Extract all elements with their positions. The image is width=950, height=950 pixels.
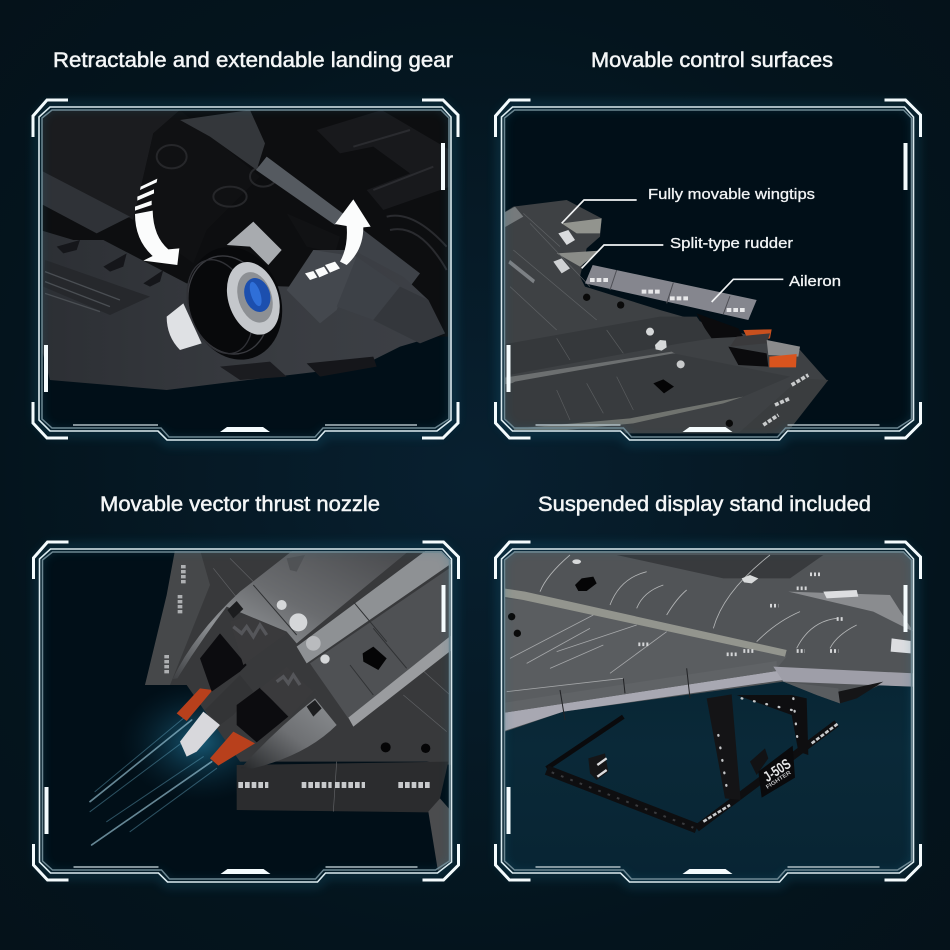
wing with tips [500, 200, 827, 433]
frame: landing gear [33, 100, 458, 442]
sign: J-50S: FIGHTER [765, 770, 792, 791]
diagonal bar [180, 110, 420, 287]
nozzles [697, 313, 800, 367]
title: control surfaces: Movable control surfaces [591, 49, 833, 72]
dark upper airframe [40, 110, 450, 337]
aileron [585, 265, 757, 320]
engine nacelles [173, 550, 452, 768]
icon: right rotation arrow [305, 199, 371, 280]
label: aileron: Aileron [789, 273, 841, 290]
frame: display stand [496, 542, 920, 884]
title: landing gear: Retractable and extendable landing gear [53, 49, 453, 72]
landing wheel [166, 222, 282, 360]
icon: left rotation arrow [135, 179, 179, 265]
aircraft wing [500, 550, 913, 733]
wing underside [40, 170, 445, 390]
panel: thrust nozzle [33, 542, 459, 884]
panel: display stand [490, 542, 923, 884]
title: thrust nozzle: Movable vector thrust nozzle [100, 493, 380, 516]
thrust streaks [90, 718, 217, 845]
engine glow [136, 694, 246, 790]
red nozzles and plate [176, 688, 255, 766]
sign: J-50S [758, 746, 795, 798]
pointer: wingtips [562, 200, 637, 223]
frame: thrust nozzle [34, 542, 458, 884]
panel: landing gear [33, 100, 458, 442]
display stand [547, 694, 838, 828]
wing and tail [145, 550, 452, 873]
sign: J-50S: J-50S [761, 756, 794, 786]
pointer: aileron [712, 279, 783, 302]
label: rudder: Split-type rudder [670, 235, 793, 252]
pointer: rudder [582, 245, 663, 268]
engine nacelles [500, 317, 828, 433]
title: display stand: Suspended display stand included [538, 493, 871, 516]
frame: control surfaces [496, 100, 920, 442]
label: wingtips: Fully movable wingtips [648, 186, 815, 203]
panel: control surfaces [490, 100, 923, 442]
